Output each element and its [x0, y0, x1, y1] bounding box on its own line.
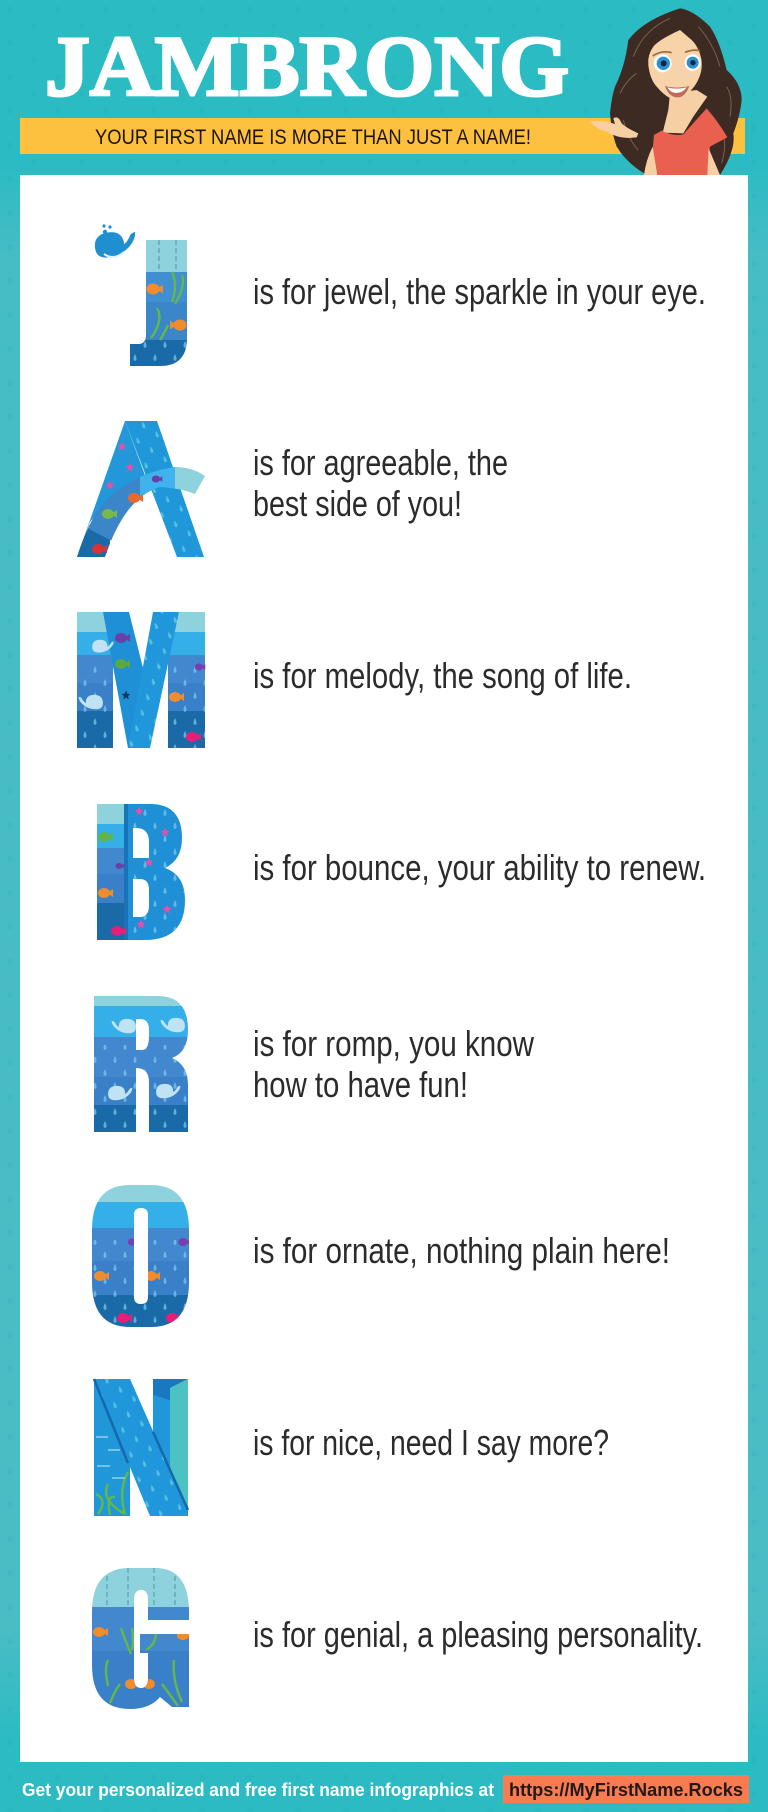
hair [610, 8, 742, 175]
neck and chest [663, 90, 707, 133]
letter N [94, 1379, 188, 1516]
letter A [70, 421, 207, 560]
text: N: is for nice, need I say more? [253, 1422, 609, 1463]
eyes [654, 54, 672, 72]
text: A [253, 442, 508, 524]
illustration: woman [590, 8, 742, 175]
footer: https://MyFirstName.Rocks [509, 1780, 743, 1800]
face [648, 30, 702, 99]
letter J [130, 240, 187, 366]
hair strands [620, 18, 731, 163]
text: R: is for romp, you know [253, 1023, 535, 1064]
footer: Get your personalized and free first name infographics at [22, 1780, 494, 1800]
text: R: how to have fun! [253, 1064, 468, 1105]
text: M: is for melody, the song of life. [253, 655, 632, 696]
banner: tagline: YOUR FIRST NAME IS MORE THAN JUST A NAME! [95, 126, 531, 149]
hand [590, 117, 638, 138]
letter R [90, 996, 190, 1132]
shirt [653, 108, 727, 175]
letter O [88, 1185, 193, 1327]
brows and smile [653, 50, 700, 56]
letter M [70, 612, 210, 748]
letter B [97, 804, 188, 940]
icon: whale [93, 224, 138, 259]
text: A: is for agreeable, the [253, 442, 508, 483]
text: R [253, 1023, 535, 1105]
text: O: is for ornate, nothing plain here! [253, 1230, 670, 1271]
arms [644, 147, 720, 175]
text: A: best side of you! [253, 483, 462, 524]
title: JAMBRONG [45, 18, 569, 114]
footer [22, 1775, 749, 1803]
letter G [88, 1568, 193, 1711]
banner: tagline [20, 118, 745, 154]
